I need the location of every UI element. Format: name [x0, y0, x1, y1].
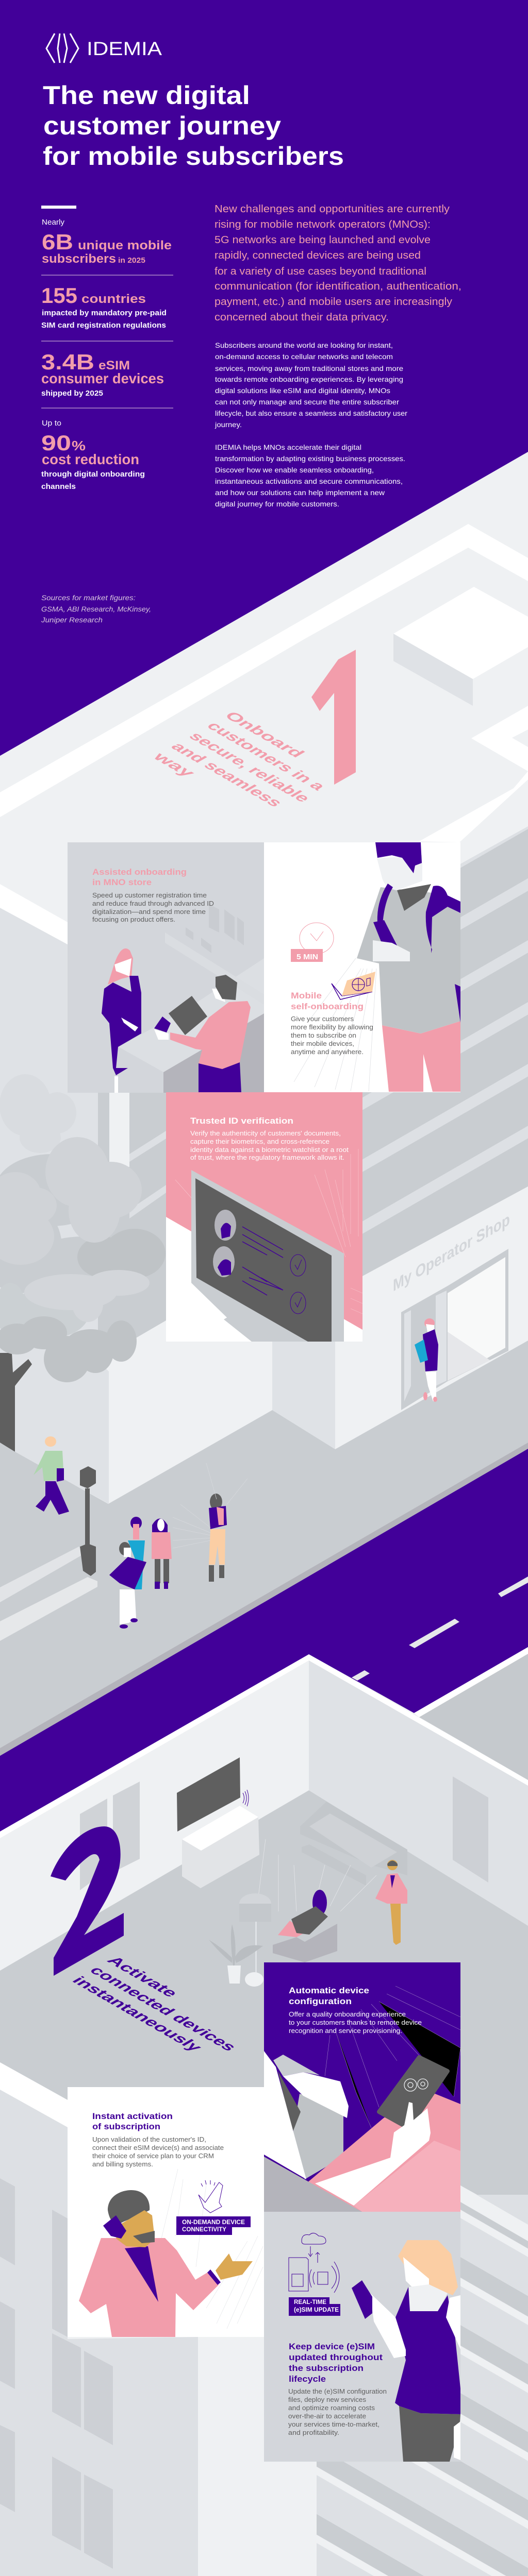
icon: clock — [300, 923, 334, 954]
sources note: Sources for market figures: — [41, 594, 136, 602]
road — [0, 1449, 528, 1832]
body text — [92, 891, 214, 923]
rays — [294, 958, 376, 1091]
body text: Upon validation of the customer's ID, — [92, 2136, 206, 2143]
label: on-demand device connectivity — [176, 2216, 251, 2235]
icon: tap hand — [199, 2180, 223, 2213]
panel: key figures: 90 — [41, 431, 71, 455]
body text — [190, 1129, 349, 1161]
label: real-time eSIM update: (e)SIM UPDATE — [294, 2306, 339, 2313]
step 1 heading: and seamless — [167, 740, 286, 809]
room: lounge building — [0, 1647, 528, 2267]
figure: girl on armchair — [273, 1890, 337, 1962]
body text: and optimize roaming costs — [288, 2404, 375, 2412]
heading: of subscription — [92, 2122, 160, 2131]
panel: key figures — [41, 206, 173, 491]
step 1 heading: Onboard — [221, 709, 308, 760]
intro paragraph: pink: rising for mobile network operators (MNOs): — [214, 219, 431, 230]
intro paragraph: IDEMIA helps — [215, 443, 405, 508]
panel: key figures: cost reduction — [42, 451, 139, 467]
heading — [289, 1986, 369, 2006]
sources note — [41, 594, 151, 624]
step 2 heading: connected devices — [86, 1964, 240, 2054]
panel: key figures: SIM card registration regulations — [41, 321, 166, 330]
body text: and billing systems. — [92, 2160, 153, 2168]
label: real-time eSIM update — [289, 2297, 340, 2316]
intro paragraph: IDEMIA helps: Discover how we enable seamless onboarding, — [215, 466, 374, 474]
body text: Give your customers — [291, 1015, 354, 1023]
intro paragraph: IDEMIA helps: and how our solutions can help implement a new — [215, 488, 385, 497]
heading: updated throughout — [289, 2352, 383, 2362]
numeral 2 — [51, 1826, 124, 1976]
intro paragraph: subscribers: services, moving away from traditional stores and more — [215, 364, 403, 372]
body text: digitalization—and spend more time — [92, 908, 206, 916]
label: on-demand device connectivity: CONNECTIVITY — [182, 2226, 226, 2233]
shop building — [362, 1187, 528, 1427]
panel: key figures: Nearly — [42, 218, 64, 227]
heading — [92, 867, 187, 887]
intro paragraph: subscribers: Subscribers around the world are looking for instant, — [215, 341, 393, 349]
heading: Instant activation — [92, 2111, 173, 2121]
panel: key figures: eSIM — [98, 359, 130, 372]
body text: over-the-air to accelerate — [288, 2412, 366, 2420]
illustration: verification monitor — [191, 1170, 344, 1342]
body text: their mobile devices, — [291, 1040, 354, 1047]
panel: key figures: through digital onboarding — [41, 470, 145, 479]
heading — [92, 2111, 173, 2131]
rays — [325, 1986, 460, 2128]
panel: key figures: consumer devices — [41, 370, 164, 386]
figure: customer with tablet — [154, 975, 251, 1093]
body text: Speed up customer registration time — [92, 891, 207, 899]
heading: in MNO store — [92, 877, 152, 887]
body text: identity data against a biometric watchlist or a root — [190, 1146, 349, 1154]
body text: recognition and service provisioning. — [289, 2027, 402, 2035]
intro paragraph: IDEMIA helps: IDEMIA helps MNOs accelerate their digital — [215, 443, 361, 451]
header panel: purple wedge — [0, 0, 528, 756]
panel: key figures: channels — [41, 482, 76, 491]
step 1 heading: secure, reliable — [185, 730, 314, 805]
intro paragraph: IDEMIA helps: transformation by adapting existing business processes. — [215, 454, 405, 463]
icon: wall TV — [177, 1757, 240, 1832]
panel: instant activation — [68, 2087, 264, 2337]
heading: the subscription — [289, 2363, 364, 2373]
panel: key figures: 3.4B — [41, 350, 94, 374]
illustration: phone and hands — [264, 2051, 460, 2212]
body text: focusing on product offers. — [92, 916, 175, 923]
heading: Mobile — [291, 991, 322, 1001]
body text: them to subscribe on — [291, 1031, 356, 1039]
title: The new digital — [43, 81, 250, 110]
body text: to your customers thanks to remote device — [289, 2019, 422, 2026]
label: 5 MIN: 5 MIN — [296, 953, 318, 961]
body text: and reduce fraud through advanced ID — [92, 900, 214, 907]
step 2 heading: instantaneously — [68, 1974, 206, 2054]
heading: Assisted onboarding — [92, 867, 187, 877]
panel: key figures: impacted by mandatory pre-paid — [42, 309, 167, 317]
body text: capture their biometrics, and cross-reference — [190, 1138, 329, 1145]
logo: IDEMIA: IDEMIA — [87, 38, 162, 59]
panel: key figures: % — [72, 438, 86, 453]
heading: Keep device (e)SIM — [289, 2342, 375, 2351]
heading: Trusted ID verification — [190, 1116, 293, 1126]
figure: walking man — [34, 1436, 69, 1515]
panel: key figures: in 2025 — [118, 256, 145, 265]
body text: your services time-to-market, — [288, 2420, 380, 2428]
rays — [155, 2169, 263, 2329]
figure: woman with phone — [352, 2240, 460, 2462]
panel: key figures: shipped by 2025 — [41, 389, 103, 398]
left tree — [0, 1074, 166, 1477]
intro paragraph: pink — [214, 204, 461, 323]
intro paragraph: subscribers: lifecycle, but also ensure a seamless and satisfactory user — [215, 409, 407, 417]
icon: street lamp — [80, 1466, 96, 1576]
panel: key figures: countries — [81, 292, 146, 306]
panel: key figures: subscribers — [42, 252, 116, 266]
heading: Automatic device — [289, 1986, 369, 1995]
illustration: store counter — [119, 904, 264, 1093]
heading: self-onboarding — [291, 1002, 364, 1011]
heading: configuration — [289, 1996, 352, 2006]
numeral 1 — [311, 650, 356, 785]
label: on-demand device connectivity: ON-DEMAND DEVICE — [182, 2218, 245, 2226]
heading: lifecycle — [289, 2374, 326, 2384]
panel: assisted onboarding — [68, 842, 264, 1093]
console — [182, 1817, 259, 1888]
lower-left building and right wall — [0, 2090, 528, 2576]
intro paragraph: subscribers: digital solutions like eSIM and digital identity, MNOs — [215, 386, 390, 395]
body text — [289, 2010, 422, 2035]
intro paragraph: subscribers: can not only manage and secure the entire subscriber — [215, 398, 399, 406]
intro paragraph: pink: New challenges and opportunities are currently — [214, 204, 450, 215]
intro paragraph: pink: payment, etc.) and mobile users are increasingly — [214, 296, 452, 308]
sofa — [300, 1802, 407, 1875]
intro paragraph: subscribers: journey. — [214, 420, 242, 429]
icon: real-time eSIM — [289, 2233, 339, 2293]
label: real-time eSIM update: REAL-TIME — [294, 2298, 326, 2306]
body text: connect their eSIM device(s) and associate — [92, 2144, 224, 2151]
figure: store assistant — [102, 948, 141, 1093]
body text: and profitability. — [288, 2429, 339, 2436]
sidewalk — [0, 1341, 528, 1756]
body text: anytime and anywhere. — [291, 1048, 364, 1056]
title: for mobile subscribers — [43, 142, 344, 171]
intro paragraph: pink: concerned about their data privacy. — [214, 312, 389, 323]
figure: man with phone — [79, 2190, 253, 2337]
panel: key figures: 155 — [41, 283, 77, 308]
panel: key figures: unique mobile — [78, 239, 172, 252]
floor lamp and plant — [209, 1893, 271, 1987]
step 1 heading — [148, 709, 350, 825]
heading — [291, 991, 364, 1011]
body text: files, deploy new services — [288, 2396, 367, 2403]
step 2 heading — [68, 1954, 258, 2063]
panel: keep device eSIM updated — [264, 2212, 460, 2462]
intro paragraph: IDEMIA helps: instantaneous activations and secure communications, — [215, 477, 403, 485]
step 1 heading: way — [148, 750, 199, 779]
title — [43, 81, 344, 171]
icon: passport — [332, 972, 375, 999]
body text — [291, 1015, 373, 1056]
logo: IDEMIA — [46, 33, 162, 63]
light rays on pink — [175, 1149, 362, 1314]
figures: street group — [109, 1463, 248, 1629]
body text — [92, 2136, 224, 2168]
panel: mobile self-onboarding — [264, 842, 460, 1092]
step 2 heading: Activate — [103, 1954, 182, 1999]
body text: Offer a quality onboarding experience — [289, 2010, 406, 2018]
figure: woman at shop door — [415, 1318, 438, 1402]
sources note: Juniper Research — [41, 616, 103, 624]
title: customer journey — [43, 111, 281, 140]
intro paragraph: pink: for a variety of use cases beyond traditional — [214, 266, 426, 277]
step 1 heading: customers in a — [203, 720, 329, 793]
body text: Verify the authenticity of customers' documents, — [190, 1129, 341, 1137]
panel: key figures: 6B — [42, 230, 73, 254]
heading — [289, 2342, 383, 2384]
intro paragraph: pink: 5G networks are being launched and evolve — [214, 234, 431, 246]
body text — [288, 2387, 387, 2436]
body text: their choice of service plan to your CRM — [92, 2152, 214, 2160]
intro paragraph: subscribers — [214, 341, 407, 429]
panel: automatic device configuration — [264, 1962, 460, 2212]
figure: man with backpack — [357, 842, 460, 1092]
body text: of trust, where the regulatory framework allows it. — [190, 1154, 344, 1161]
body text: Update the (e)SIM configuration — [288, 2387, 387, 2395]
figure: man in pink jacket — [375, 1860, 407, 1945]
body text: more flexibility by allowing — [291, 1023, 373, 1031]
sources note: GSMA, ABI Research, McKinsey, — [41, 605, 151, 613]
intro paragraph: pink: communication (for identification, authentication, — [214, 281, 461, 292]
panel: trusted ID verification — [166, 1092, 362, 1342]
label: 5 MIN — [291, 949, 323, 962]
intro paragraph: pink: rapidly, connected devices are being used — [214, 250, 421, 261]
panel: key figures: Up to — [42, 419, 61, 428]
intro paragraph: subscribers: on-demand access to cellular networks and telecom — [215, 352, 393, 361]
shop sign: My Operator Shop — [393, 1209, 510, 1295]
intro paragraph: IDEMIA helps: digital journey for mobile customers. — [215, 500, 339, 508]
intro paragraph: subscribers: towards remote onboarding experiences. By leveraging — [215, 375, 403, 383]
